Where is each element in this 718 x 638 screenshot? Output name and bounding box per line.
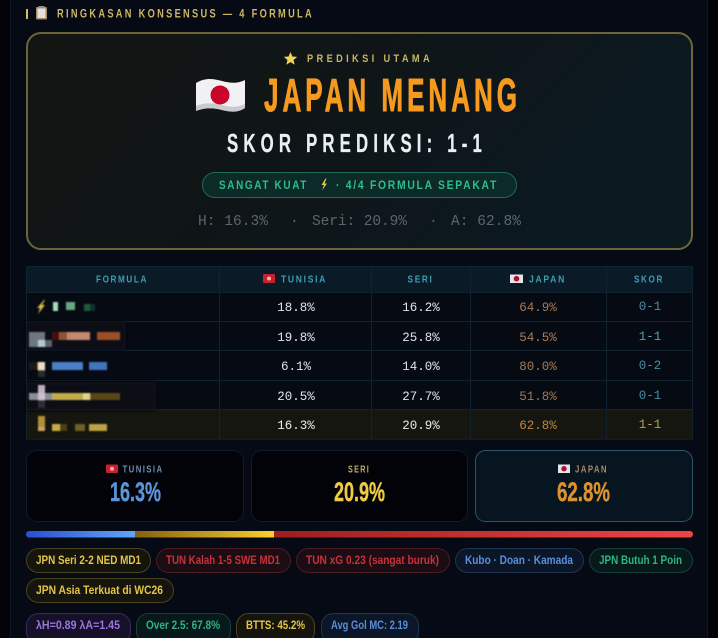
- tag: JPN asia: [26, 578, 174, 602]
- card: japan: 62.8%: [557, 477, 610, 507]
- tag: JPN asia: JPN Asia Terkuat di WC26: [36, 585, 163, 597]
- tag: TUN xG: [296, 548, 450, 572]
- tag: players: Kubo · Doan · Kamada: [465, 555, 574, 567]
- icon: tunisia flag: [263, 274, 275, 283]
- row 5: consensus: 16.3%: [277, 419, 315, 433]
- row 3: 6.1%: [281, 360, 311, 374]
- section heading: ringkasan konsensus: RINGKASAN KONSENSUS — 4 FORMULA: [57, 6, 314, 20]
- row 1: 64.9%: [519, 301, 557, 315]
- probability summary: A: 62.8%: [451, 214, 521, 230]
- icon: bolt: [322, 178, 327, 190]
- card: tunisia: TUNISIA: [122, 464, 164, 476]
- redacted formula name: [37, 300, 95, 314]
- row 1: [37, 300, 661, 315]
- icon: japan flag small: [558, 464, 570, 473]
- table header: SKOR: [634, 274, 664, 286]
- consensus pill: SANGAT KUAT: [219, 178, 308, 192]
- row 4: 0-1: [639, 389, 661, 403]
- card: japan: [476, 450, 692, 522]
- panel: main prediction: [27, 33, 692, 249]
- table: formula comparison: [26, 266, 692, 440]
- probability summary: ·: [290, 214, 299, 230]
- row 2: 1-1: [639, 330, 661, 344]
- redacted formula name: [29, 385, 120, 408]
- icon: clipboard: [36, 6, 47, 20]
- tag: avg gol: [322, 614, 418, 638]
- card: seri: 20.9%: [334, 477, 385, 507]
- row 2: [29, 330, 661, 347]
- row 2: 25.8%: [402, 331, 440, 345]
- row 5: consensus: 62.8%: [519, 419, 557, 433]
- tag: over 2.5: [136, 614, 230, 638]
- tag: lambda: [26, 614, 130, 638]
- tag: btts: BTTS: 45.2%: [246, 620, 305, 632]
- headline: japan menang: JAPAN MENANG: [264, 69, 521, 121]
- row 4: 27.7%: [402, 390, 440, 404]
- card: japan: JAPAN: [575, 464, 608, 476]
- label: prediksi utama: PREDIKSI UTAMA: [307, 53, 433, 65]
- row 1: 18.8%: [277, 301, 315, 315]
- predicted score: SKOR PREDIKSI: 1-1: [227, 128, 487, 158]
- tag: JPN butuh: JPN Butuh 1 Poin: [599, 555, 682, 567]
- table header: SERI: [408, 274, 434, 286]
- consensus pill: · 4/4 FORMULA SEPAKAT: [336, 178, 498, 192]
- icon: star: [284, 52, 297, 65]
- row 5: consensus: 1-1: [639, 418, 661, 432]
- table header: TUNISIA: [281, 274, 327, 286]
- tag: JPN seri: [26, 548, 150, 572]
- redacted formula name: [29, 362, 107, 377]
- tags: [26, 548, 692, 638]
- probability summary: ·: [429, 214, 438, 230]
- row 2: 19.8%: [277, 331, 315, 345]
- row 3: 0-2: [639, 359, 661, 373]
- table header: [27, 267, 692, 292]
- table header: JAPAN: [529, 274, 566, 286]
- probability bar: [26, 531, 693, 538]
- tag: JPN butuh: [590, 548, 692, 572]
- card: tunisia: [26, 450, 244, 522]
- redacted formula name: [29, 332, 120, 347]
- tag: TUN xG: TUN xG 0.23 (sangat buruk): [306, 555, 439, 567]
- row 4: [29, 385, 661, 408]
- probability summary: H: 16.3%: [198, 214, 268, 230]
- table header: FORMULA: [96, 274, 148, 286]
- tag: TUN kalah: [156, 548, 290, 572]
- row 4: 20.5%: [277, 390, 315, 404]
- row 3: [29, 359, 661, 377]
- tag: players: [456, 548, 584, 572]
- tag: avg gol: Avg Gol MC: 2.19: [331, 620, 408, 632]
- redacted formula name: [38, 416, 107, 431]
- row 4: 51.8%: [519, 390, 557, 404]
- icon: japan flag small: [510, 274, 523, 283]
- tag: TUN kalah: TUN Kalah 1-5 SWE MD1: [166, 555, 281, 567]
- row 3: 14.0%: [402, 360, 440, 374]
- row 5: consensus: [38, 416, 661, 433]
- tag: btts: [236, 614, 314, 638]
- consensus pill: [202, 172, 516, 198]
- card: seri: SERI: [348, 464, 370, 476]
- tag: over 2.5: Over 2.5: 67.8%: [146, 620, 220, 632]
- icon: tunisia flag: [106, 464, 118, 473]
- row 2: 54.5%: [519, 331, 557, 345]
- probability summary: [198, 214, 521, 230]
- card: seri: [252, 450, 468, 522]
- icon: japan flag: [196, 79, 245, 112]
- card: tunisia: 16.3%: [110, 477, 161, 507]
- row 1: 0-1: [639, 300, 661, 314]
- tag: JPN seri: JPN Seri 2-2 NED MD1: [36, 555, 142, 567]
- section heading: ringkasan konsensus: [26, 6, 314, 20]
- row 1: 16.2%: [402, 301, 440, 315]
- row 5: consensus: 20.9%: [402, 419, 440, 433]
- tag: lambda: λH=0.89 λA=1.45: [36, 620, 121, 632]
- row 3: 80.0%: [519, 360, 557, 374]
- probability summary: Seri: 20.9%: [312, 214, 407, 230]
